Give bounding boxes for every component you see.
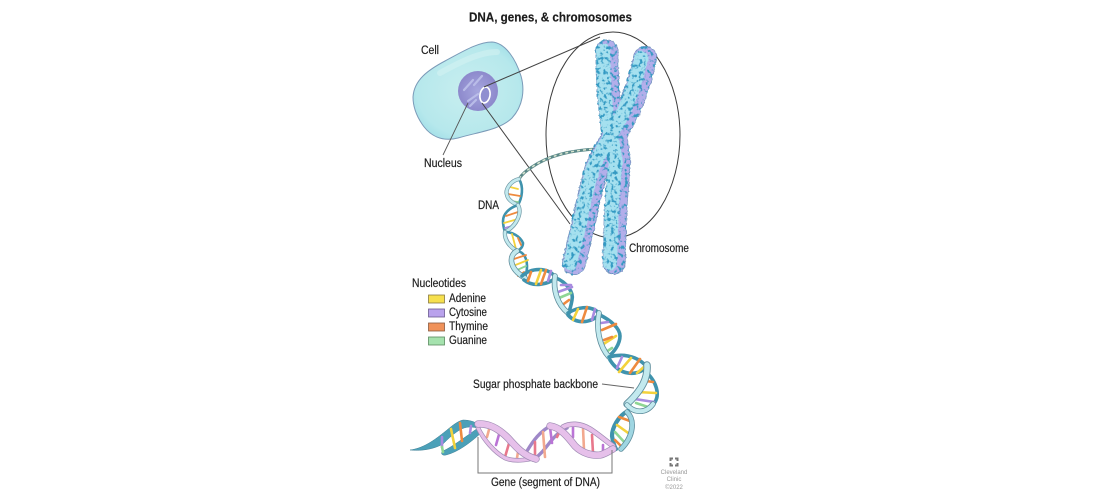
label: nucleus: Nucleus	[424, 158, 462, 170]
legend: nucleotides	[412, 278, 488, 347]
logo text: Cleveland	[661, 470, 687, 476]
cell illustration	[413, 42, 523, 139]
cell body	[413, 42, 523, 139]
nucleus chromatin	[464, 76, 482, 106]
top rail, second turn	[563, 424, 613, 446]
title: DNA, genes, & chromosomes	[469, 10, 632, 24]
Cleveland Clinic logo: ©2022	[665, 484, 684, 491]
nucleus	[458, 71, 498, 111]
left tail	[410, 420, 481, 455]
cell highlight	[440, 52, 497, 73]
purple back strands	[527, 425, 552, 451]
lower rail, first turn	[478, 428, 530, 460]
thymine: Thymine	[449, 321, 488, 333]
logo mark	[670, 458, 678, 466]
leader: sugar phosphate backbone	[602, 384, 634, 388]
lower right turns	[609, 355, 657, 449]
label: gene: Gene (segment of DNA)	[491, 477, 600, 489]
small upper turns	[503, 179, 528, 278]
Cleveland Clinic logo	[661, 458, 687, 491]
DNA helix	[410, 179, 657, 460]
rungs	[487, 426, 490, 437]
label: cell: Cell	[421, 45, 439, 57]
nucleus zoom ring	[479, 86, 491, 104]
adenine: Adenine	[449, 293, 486, 305]
guanine: Guanine	[449, 335, 487, 347]
DNA thin strand	[519, 149, 598, 179]
label: DNA: DNA	[478, 200, 499, 212]
bracket: gene	[478, 437, 612, 473]
cytosine: Cytosine	[449, 307, 487, 319]
legend heading: Nucleotides	[412, 278, 466, 290]
gene segment	[478, 424, 613, 460]
label: chromosome: Chromosome	[629, 243, 689, 255]
zoom ellipse around chromosome	[546, 32, 680, 238]
chromosome	[570, 51, 645, 263]
nucleus leader line	[443, 103, 468, 155]
mid turns	[522, 270, 620, 357]
zoom lines from nucleus	[482, 37, 600, 224]
label: sugar phosphate backbone: Sugar phosphate backbone	[473, 379, 598, 391]
front ribbon, second turn	[550, 426, 613, 455]
front ribbon, first turn	[478, 424, 536, 459]
Cleveland Clinic logo: Clinic	[667, 477, 681, 483]
